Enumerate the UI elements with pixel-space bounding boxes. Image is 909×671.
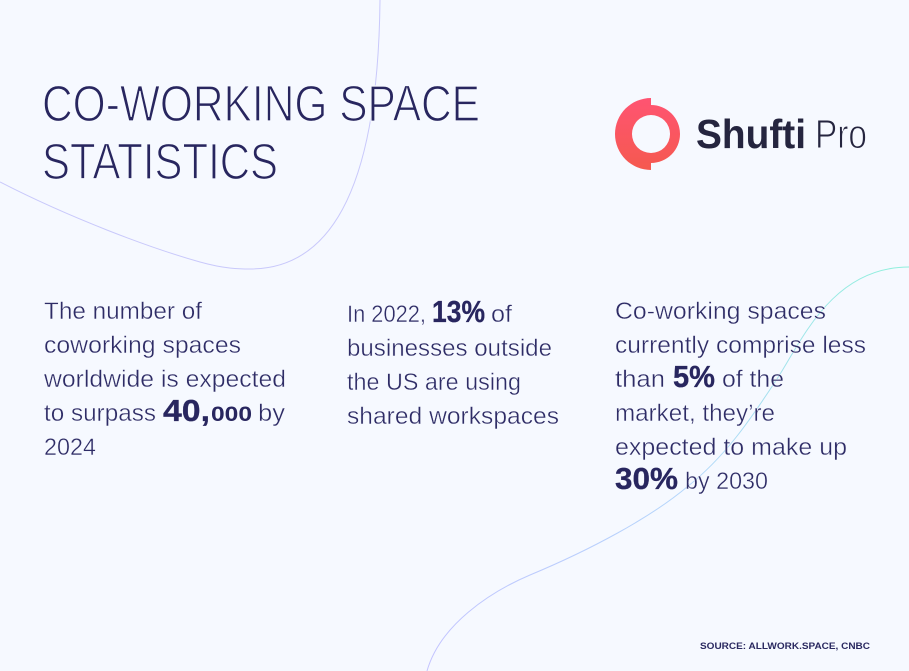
text block: column 3 xyxy=(615,298,866,496)
text block: column 1: coworking spaces xyxy=(44,332,241,359)
stat: 30%: 30% xyxy=(615,461,678,496)
stat: 40,000 xyxy=(163,393,252,428)
stat: 40,000: 40, xyxy=(163,393,210,428)
text block: column 1: by xyxy=(258,400,285,427)
text block: column 3: than xyxy=(615,366,665,393)
stat: 13%: 13% xyxy=(432,294,485,329)
text block: column 3: of the xyxy=(722,366,784,393)
title xyxy=(42,75,480,190)
logo wordmark: Shufti xyxy=(696,111,806,157)
source note: SOURCE: ALLWORK.SPACE, CNBC xyxy=(700,641,870,652)
text block: column 3: market, they’re xyxy=(615,400,775,427)
logo wordmark xyxy=(696,111,867,157)
text block: column 1 xyxy=(43,298,286,461)
logo wordmark: Pro xyxy=(815,111,867,157)
text block: column 3: by 2030 xyxy=(685,468,768,495)
logo: Shufti Pro xyxy=(615,98,867,170)
stat: 5%: 5% xyxy=(673,359,715,394)
curve: top-left purple line xyxy=(0,0,380,269)
text block: column 1: 2024 xyxy=(44,434,96,461)
text block: column 3: Co-working spaces xyxy=(615,298,826,325)
curve: lower-right gradient line xyxy=(427,267,909,671)
icon: logo ring xyxy=(615,98,680,170)
text block: column 2: the US are using xyxy=(347,369,521,396)
text block: column 2: of xyxy=(491,301,512,328)
stat: 40,000: 000 xyxy=(211,403,252,426)
text block: column 1: The number of xyxy=(44,298,202,325)
text block: column 1: worldwide is expected xyxy=(43,366,286,393)
title: CO-WORKING SPACE xyxy=(42,75,480,132)
text block: column 3: currently comprise less xyxy=(615,332,866,359)
text block: column 1: to surpass xyxy=(44,400,156,427)
text block: column 2: businesses outside xyxy=(347,335,552,362)
text block: column 3: expected to make up xyxy=(615,434,847,461)
text block: column 2: In 2022, xyxy=(347,301,426,328)
title: STATISTICS xyxy=(42,133,278,190)
text block: column 2: shared workspaces xyxy=(347,403,559,430)
text block: column 2 xyxy=(347,294,559,430)
